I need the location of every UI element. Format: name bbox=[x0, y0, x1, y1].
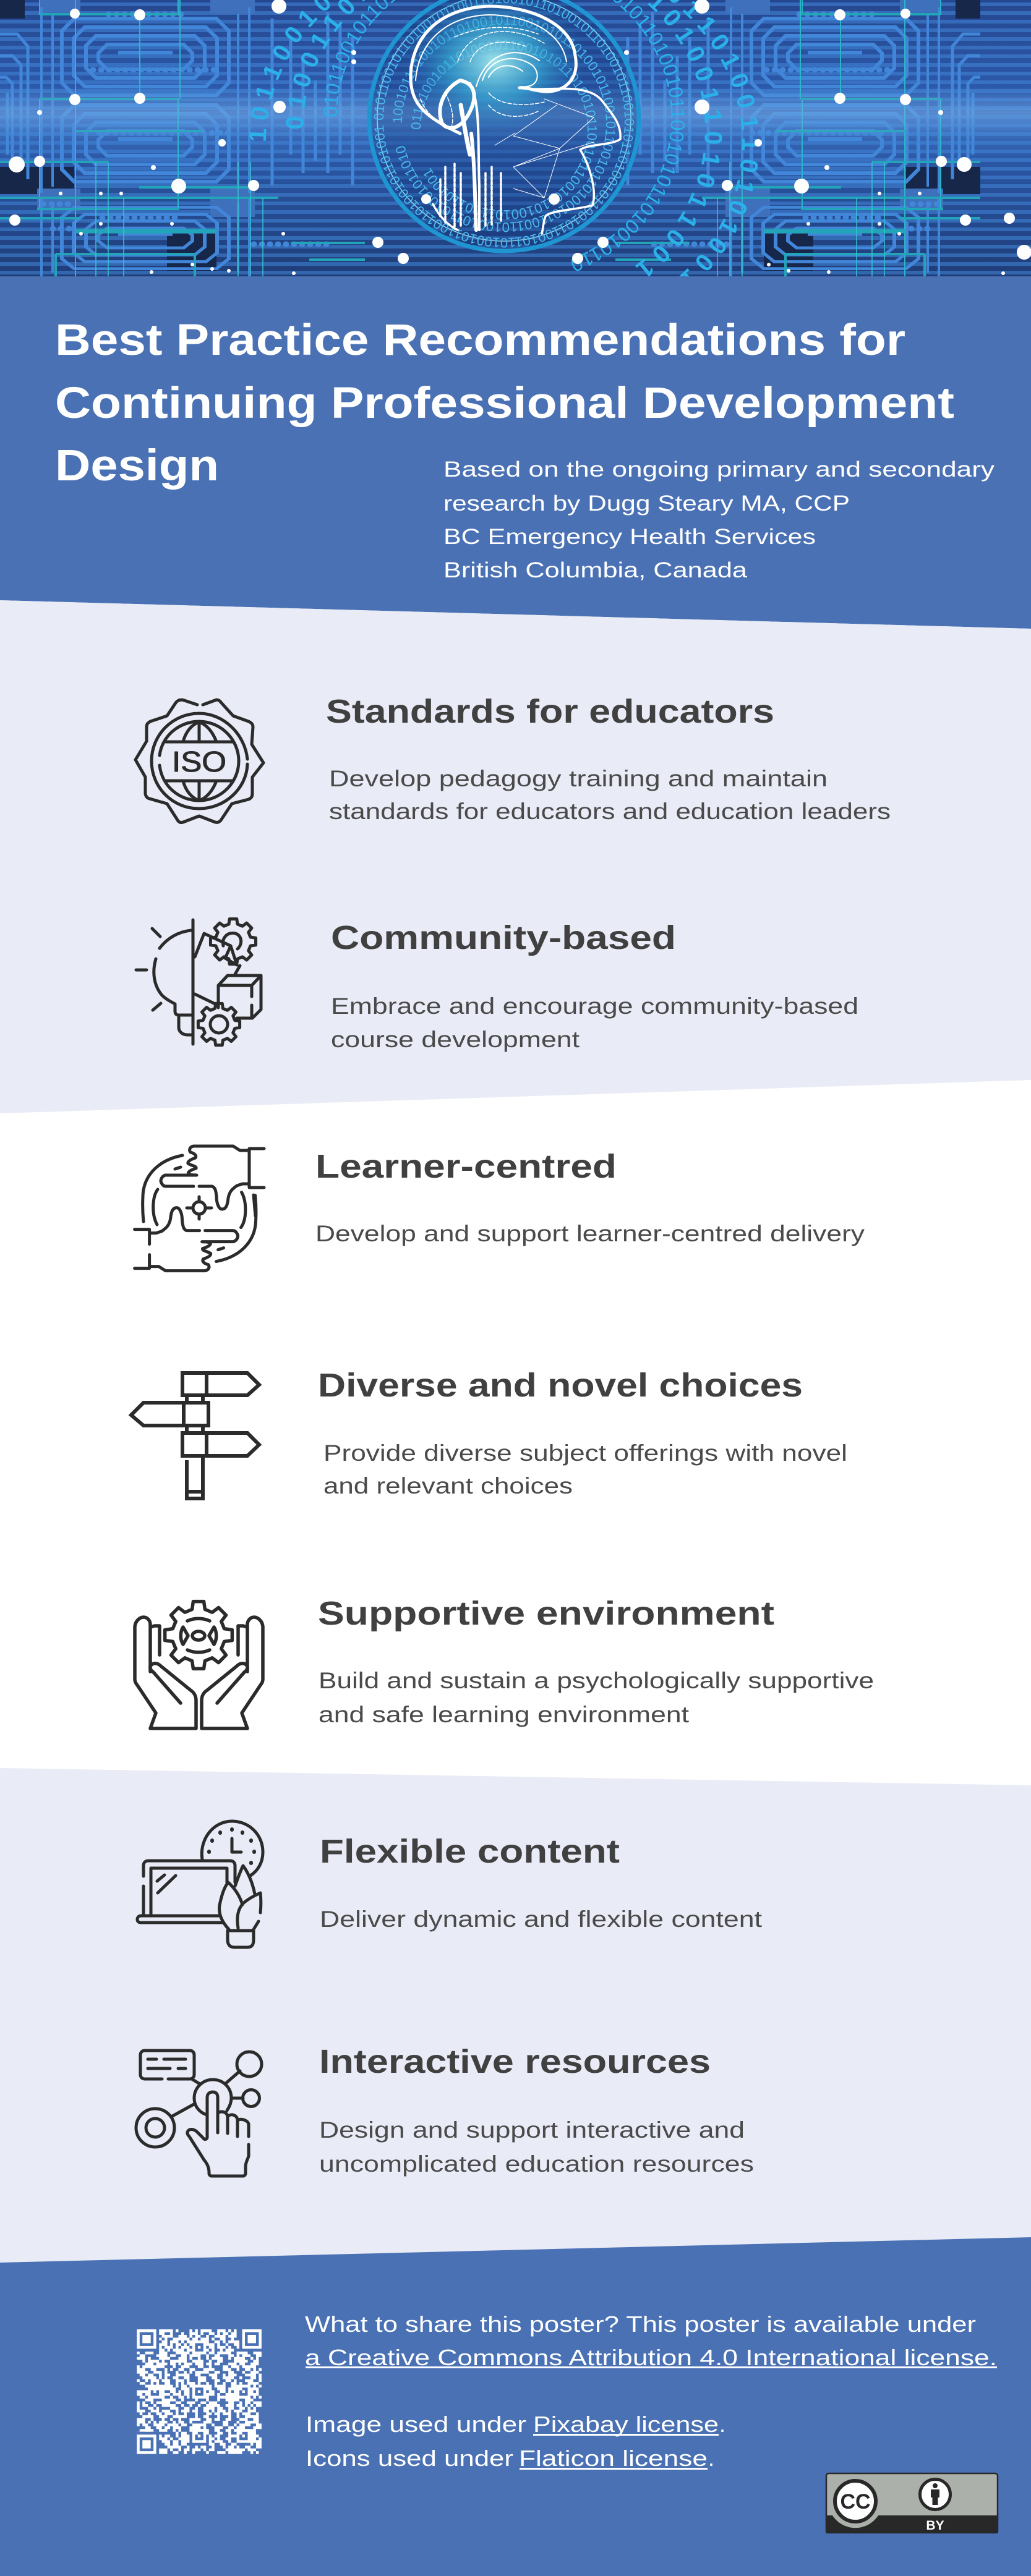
footer license text: Icons used under bbox=[306, 2446, 513, 2471]
header image: brain over circuit board: 1001011010010110100101100101011010010110010110010110100101100110100101101001011010 bbox=[393, 15, 616, 232]
author text block: research by Dugg Steary MA, CCP bbox=[443, 491, 850, 516]
body: community-based bbox=[331, 993, 858, 1052]
footer license text: a Creative Commons Attribution 4.0 International license. bbox=[305, 2345, 997, 2370]
CC BY badge bbox=[826, 2473, 998, 2533]
CC BY badge: BY bbox=[926, 2519, 944, 2533]
header image: brain over circuit board bbox=[0, 0, 1031, 276]
heading: learner-centred: Learner-centred bbox=[315, 1148, 617, 1185]
body: flexible content: Deliver dynamic and flexible content bbox=[320, 1906, 763, 1932]
icon: laptop, clock and plant bbox=[137, 1821, 263, 1947]
body: supportive environment: and safe learning environment bbox=[319, 1702, 690, 1727]
body: interactive resources bbox=[319, 2117, 754, 2177]
author text block: British Columbia, Canada bbox=[443, 558, 748, 582]
icon: ISO globe badge bbox=[135, 700, 263, 823]
body: standards for educators: Develop pedagogy training and maintain bbox=[329, 766, 828, 791]
body: diverse and novel choices: Provide diverse subject offerings with novel bbox=[323, 1440, 847, 1466]
body: standards for educators bbox=[329, 766, 891, 824]
heading: standards for educators: Standards for educators bbox=[326, 693, 774, 730]
body: interactive resources: uncomplicated education resources bbox=[319, 2151, 754, 2177]
title: Continuing Professional Development bbox=[55, 379, 954, 428]
body: interactive resources: Design and support interactive and bbox=[319, 2117, 745, 2143]
title: Design bbox=[55, 441, 219, 490]
CC BY badge: CC bbox=[840, 2490, 871, 2514]
body: standards for educators: standards for educators and education leaders bbox=[329, 799, 891, 824]
body: community-based: course development bbox=[331, 1027, 580, 1052]
band: lavender panel two bbox=[0, 1768, 1031, 2263]
icon: lightbulb and gears bbox=[136, 919, 261, 1045]
body: community-based: Embrace and encourage community-based bbox=[331, 993, 858, 1019]
body: diverse and novel choices: and relevant choices bbox=[323, 1473, 573, 1498]
heading: interactive resources: Interactive resources bbox=[319, 2043, 711, 2080]
heading: diverse and novel choices: Diverse and novel choices bbox=[318, 1367, 803, 1404]
author text block bbox=[443, 457, 995, 582]
footer license text: Flaticon license bbox=[519, 2446, 708, 2471]
author text block: BC Emergency Health Services bbox=[443, 525, 816, 549]
title: Best Practice Recommendations for bbox=[55, 316, 905, 365]
footer license text: Image used under bbox=[306, 2412, 526, 2437]
footer license text: . bbox=[708, 2446, 714, 2471]
icon: hands holding gear bbox=[135, 1602, 263, 1728]
icon: signpost bbox=[131, 1373, 259, 1498]
icon: two hands around target bbox=[135, 1146, 264, 1271]
body: supportive environment bbox=[319, 1668, 874, 1727]
footer license text: . bbox=[719, 2412, 725, 2437]
icon text: ISO: ISO bbox=[172, 746, 226, 778]
band: blue title panel bbox=[0, 276, 1031, 629]
title bbox=[55, 316, 954, 490]
icon: touch hand on network bbox=[136, 2051, 262, 2176]
header image: brain over circuit board: 0110100101101001011001010110100101100101100101101001011001101001 bbox=[411, 40, 597, 220]
author text block: Based on the ongoing primary and secondary bbox=[443, 457, 995, 482]
band: blue footer panel bbox=[0, 2237, 1031, 2576]
body: diverse and novel choices bbox=[323, 1440, 847, 1498]
footer license text: Pixabay license bbox=[533, 2412, 719, 2437]
footer license text: What to share this poster? This poster is available under bbox=[305, 2311, 976, 2337]
band: lavender panel one bbox=[0, 600, 1031, 1113]
QR code bbox=[137, 2329, 262, 2454]
heading: community-based: Community-based bbox=[331, 919, 676, 956]
footer license text bbox=[305, 2311, 997, 2471]
heading: supportive environment: Supportive environment bbox=[318, 1595, 774, 1632]
body: supportive environment: Build and sustain a psychologically supportive bbox=[319, 1668, 874, 1693]
body: learner-centred: Develop and support learner-centred delivery bbox=[315, 1221, 865, 1246]
heading: flexible content: Flexible content bbox=[320, 1833, 620, 1870]
